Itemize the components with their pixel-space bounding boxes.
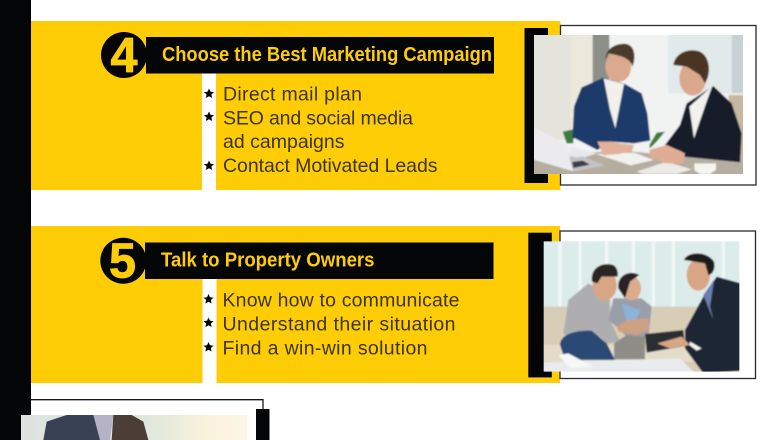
photo card: step 5	[528, 227, 756, 387]
photo card: next step (cropped)	[21, 400, 270, 440]
step 4 number badge: 4	[110, 29, 138, 83]
step 5 photo frame	[560, 231, 756, 378]
left black sidebar	[0, 0, 31, 440]
step 5 heading bar	[145, 242, 494, 279]
step 5 black bracket	[528, 233, 552, 377]
panel: step 5	[31, 226, 560, 383]
step 4 photo frame	[560, 26, 756, 185]
step 4 bullet list	[204, 84, 438, 177]
step 4 bullet list: Direct mail plan	[223, 84, 362, 106]
photo card: step 4	[520, 20, 757, 187]
step 5 bullet list	[203, 290, 460, 360]
next step black bracket	[256, 409, 270, 440]
next step frame line	[31, 400, 263, 409]
step 4 black bracket	[524, 28, 548, 183]
photo: businessman in suit (cropped)	[21, 415, 247, 440]
step 5 number badge: 5	[109, 234, 136, 288]
step 5 yellow background	[31, 226, 560, 383]
step 5 bullet list: Know how to communicate	[222, 290, 460, 312]
step 4 bullet list: ad campaigns	[223, 131, 345, 153]
step 5 bullet list: Understand their situation	[222, 314, 456, 336]
step 5 number badge	[100, 234, 146, 288]
step 4 yellow background	[31, 21, 560, 190]
step 5 bullet list: Find a win-win solution	[222, 338, 428, 360]
step 4 bullet list: Contact Motivated Leads	[223, 155, 438, 177]
step 5 heading: Talk to Property Owners	[161, 250, 374, 272]
panel: step 4	[31, 21, 560, 190]
photo: agent talking with couple	[544, 241, 740, 372]
photo: two businessmen at a desk	[534, 35, 743, 174]
step 4 heading bar	[146, 37, 494, 74]
step 4 bullet list: SEO and social media	[223, 107, 413, 129]
step 4 heading: Choose the Best Marketing Campaign	[162, 44, 492, 66]
step 4 number badge	[101, 29, 147, 83]
